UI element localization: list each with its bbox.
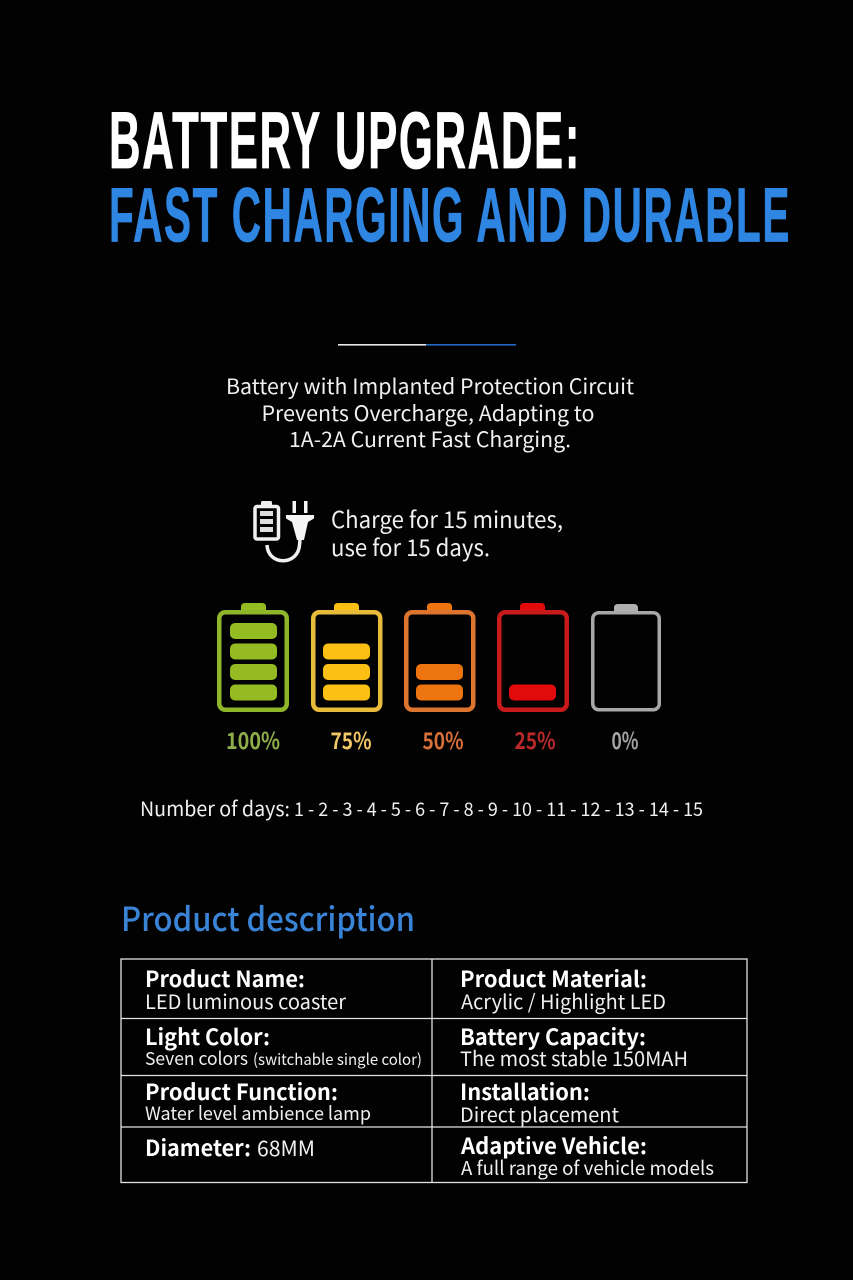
intro text [226, 371, 634, 454]
cell: product material: Acrylic / Highlight LED [461, 986, 666, 1015]
battery 25% [499, 603, 567, 710]
number of days: 1 - 2 - 3 - 4 - 5 - 6 - 7 - 8 - 9 - 10 - 11 - 12 - 13 - 14 - 15 [294, 795, 703, 822]
percentage labels: 75% [330, 722, 372, 756]
charge time text [331, 501, 563, 563]
cell: battery capacity: The most stable 150MAH [460, 1043, 688, 1072]
percentage labels: 100% [226, 722, 280, 756]
cell: adaptive vehicle [460, 1129, 714, 1181]
cell: product name: Product Name: [145, 962, 305, 994]
cell: diameter: 68MM [257, 1133, 315, 1163]
divider [338, 344, 516, 346]
battery 50% [406, 603, 473, 710]
icon: battery and plug [255, 501, 314, 561]
cell: product material [460, 962, 666, 1015]
table grid [121, 959, 747, 1182]
title [109, 96, 791, 258]
cell: diameter [145, 1131, 315, 1163]
intro text: 1A-2A Current Fast Charging. [289, 424, 571, 454]
heading: product description: Product description [121, 893, 415, 941]
number of days: Number of days: [140, 793, 290, 822]
battery 0% [593, 604, 659, 710]
cell: installation [460, 1075, 619, 1128]
cell: adaptive vehicle: Adaptive Vehicle: [460, 1129, 647, 1161]
cell: adaptive vehicle: A full range of vehicle models [461, 1154, 714, 1181]
cell: product material: Product Material: [460, 962, 647, 994]
number of days [140, 793, 703, 822]
cell: product function: Water level ambience lamp [145, 1100, 371, 1126]
cell: light color: (switchable single color) [253, 1048, 422, 1070]
cell: installation: Direct placement [460, 1099, 619, 1128]
cell: product function: Product Function: [145, 1075, 338, 1107]
cell: light color [145, 1020, 422, 1071]
charge time text: use for 15 days. [331, 529, 490, 563]
battery 100% [219, 603, 287, 710]
percentage labels: 25% [514, 722, 556, 756]
cell: product name: LED luminous coaster [145, 986, 346, 1015]
cell: product name [145, 962, 346, 1015]
cell: diameter: Diameter: [145, 1131, 251, 1163]
intro text: Prevents Overcharge, Adapting to [262, 398, 594, 428]
percentage labels: 50% [422, 722, 464, 756]
specification table [121, 959, 747, 1182]
percentage labels: 0% [612, 722, 638, 756]
cell: product function [145, 1075, 371, 1126]
intro text: Battery with Implanted Protection Circuit [226, 371, 634, 401]
cell: battery capacity: Battery Capacity: [460, 1020, 646, 1052]
cell: installation: Installation: [460, 1075, 590, 1107]
battery 75% [313, 603, 380, 710]
percentage labels [226, 722, 638, 756]
cell: light color: Light Color: [145, 1020, 270, 1052]
cell: light color: Seven colors [145, 1045, 248, 1071]
charge time text: Charge for 15 minutes, [331, 501, 563, 535]
cell: battery capacity [460, 1020, 688, 1072]
